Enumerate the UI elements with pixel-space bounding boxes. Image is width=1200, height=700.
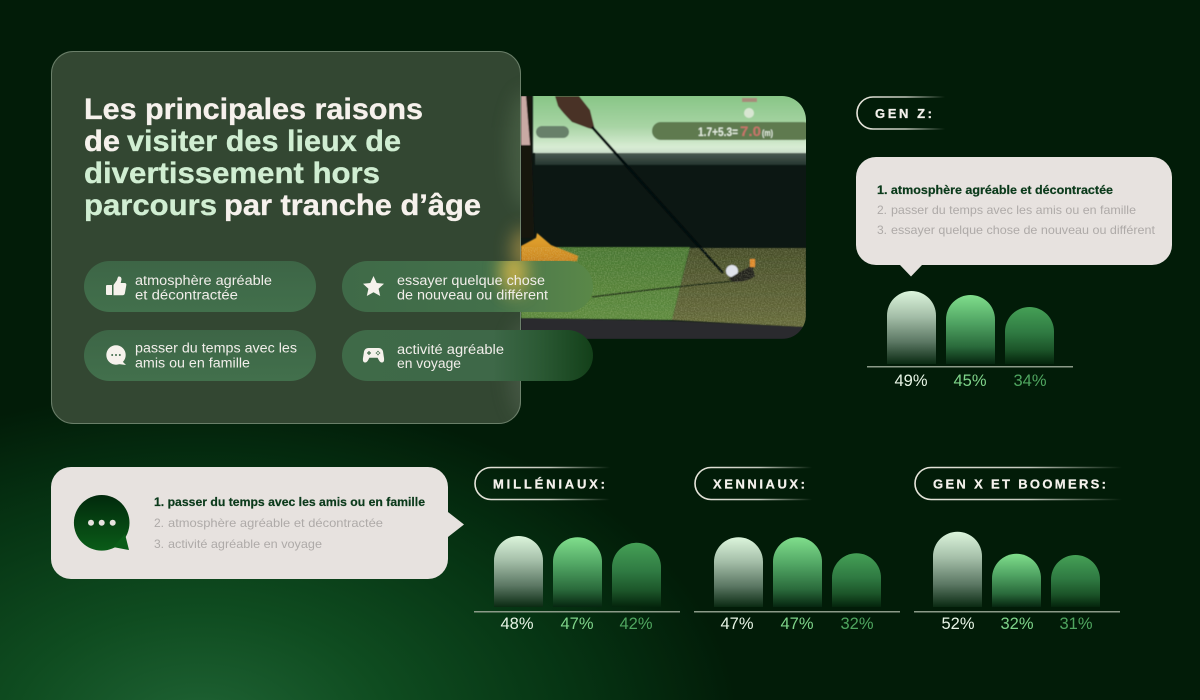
bar chart: Gen Z: 49% bbox=[894, 372, 928, 390]
label pill: Gen X et Boomers: GEN X ET BOOMERS: bbox=[933, 476, 1106, 492]
heading: par tranche d’âge bbox=[224, 189, 481, 222]
legend chip: atmosphère agréable bbox=[84, 261, 316, 312]
bar chart: Xenniaux: 47% bbox=[720, 615, 754, 633]
bar chart: Xenniaux: 47% bbox=[780, 615, 814, 633]
panel: title and legend card bbox=[51, 51, 593, 424]
callout: Gen Z ranking: 1. atmosphère agréable et décontractée bbox=[877, 183, 1113, 197]
bar chart: Gen X et Boomers: 32% bbox=[1000, 615, 1034, 633]
legend chip: activité agréable: en voyage bbox=[397, 356, 461, 371]
bar chart: Milléniaux: 47% bbox=[560, 615, 594, 633]
callout: Milléniaux ranking: atmosphère agréable et décontractée bbox=[168, 516, 383, 530]
label pill: Gen Z: GEN Z: bbox=[875, 106, 932, 121]
label pill: Milléniaux bbox=[475, 468, 610, 500]
legend chip: essayer quelque chose: de nouveau ou différent bbox=[397, 288, 548, 302]
photo: golfer on simulator: 1.7+5.3= bbox=[698, 125, 738, 139]
legend chip: atmosphère agréable: et décontractée bbox=[135, 288, 238, 302]
legend chip: passer du temps bbox=[84, 330, 316, 381]
bar chart: Gen Z: 45% bbox=[953, 372, 987, 390]
label pill: Xenniaux bbox=[695, 468, 812, 500]
bar chart: Gen Z bbox=[867, 291, 1073, 390]
callout: Gen Z ranking: passer du temps avec les amis ou en famille bbox=[891, 203, 1136, 217]
callout: Gen Z ranking: 3. bbox=[877, 223, 887, 237]
label pill: Gen X et Boomers bbox=[915, 468, 1122, 500]
callout: Gen Z ranking: 2. bbox=[877, 203, 887, 217]
icon: gamepad bbox=[363, 348, 384, 362]
legend chip: atmosphère agréable: atmosphère agréable bbox=[135, 273, 272, 288]
photo: golfer on simulator bbox=[521, 96, 806, 339]
heading: de bbox=[84, 125, 120, 158]
heading: visiter des lieux de bbox=[127, 125, 401, 158]
legend chip: passer du temps: amis ou en famille bbox=[135, 356, 250, 370]
callout: Milléniaux ranking: activité agréable en voyage bbox=[168, 537, 322, 551]
label pill: Milléniaux: MILLÉNIAUX: bbox=[493, 476, 605, 492]
label pill: Xenniaux: XENNIAUX: bbox=[713, 476, 805, 492]
callout: Milléniaux ranking: 1. passer du temps avec les amis ou en famille bbox=[154, 495, 425, 509]
heading: Les principales raisons bbox=[84, 93, 423, 126]
callout: Gen Z ranking bbox=[856, 157, 1172, 276]
icon: star bbox=[363, 276, 384, 296]
legend chip: essayer quelque chose bbox=[342, 261, 593, 312]
bar chart: Milléniaux: 42% bbox=[619, 615, 653, 633]
callout: Gen Z ranking: essayer quelque chose de nouveau ou différent bbox=[891, 223, 1156, 237]
callout: Milléniaux ranking: 3. bbox=[154, 537, 164, 551]
photo: golfer on simulator: 7.0 bbox=[740, 123, 761, 139]
legend chip: activité agréable: activité agréable bbox=[397, 342, 504, 357]
bar chart: Xenniaux bbox=[694, 537, 900, 633]
callout: Milléniaux ranking: 2. bbox=[154, 516, 164, 530]
legend chip: passer du temps: passer du temps avec les bbox=[135, 340, 297, 356]
heading bbox=[84, 93, 481, 222]
bar chart: Milléniaux: 48% bbox=[500, 615, 534, 633]
bar chart: Gen X et Boomers: 52% bbox=[941, 615, 975, 633]
icon: thumbs up bbox=[106, 276, 126, 295]
bar chart: Gen Z: 34% bbox=[1013, 372, 1047, 390]
callout: Milléniaux ranking bbox=[51, 467, 464, 579]
bar chart: Gen X et Boomers bbox=[914, 532, 1120, 633]
legend chip: activité agréable bbox=[342, 330, 593, 381]
legend chip: essayer quelque chose: essayer quelque chose bbox=[397, 273, 545, 288]
photo: golfer on simulator: (m) bbox=[762, 128, 773, 138]
bar chart: Xenniaux: 32% bbox=[840, 615, 874, 633]
bar chart: Gen X et Boomers: 31% bbox=[1059, 615, 1093, 633]
heading: divertissement hors bbox=[84, 157, 380, 190]
icon: chat bubble dark bbox=[74, 495, 130, 551]
heading: parcours bbox=[84, 189, 217, 222]
bar chart: Milléniaux bbox=[474, 536, 680, 633]
icon: chat bubble bbox=[106, 345, 126, 365]
label pill: Gen Z bbox=[857, 97, 945, 129]
